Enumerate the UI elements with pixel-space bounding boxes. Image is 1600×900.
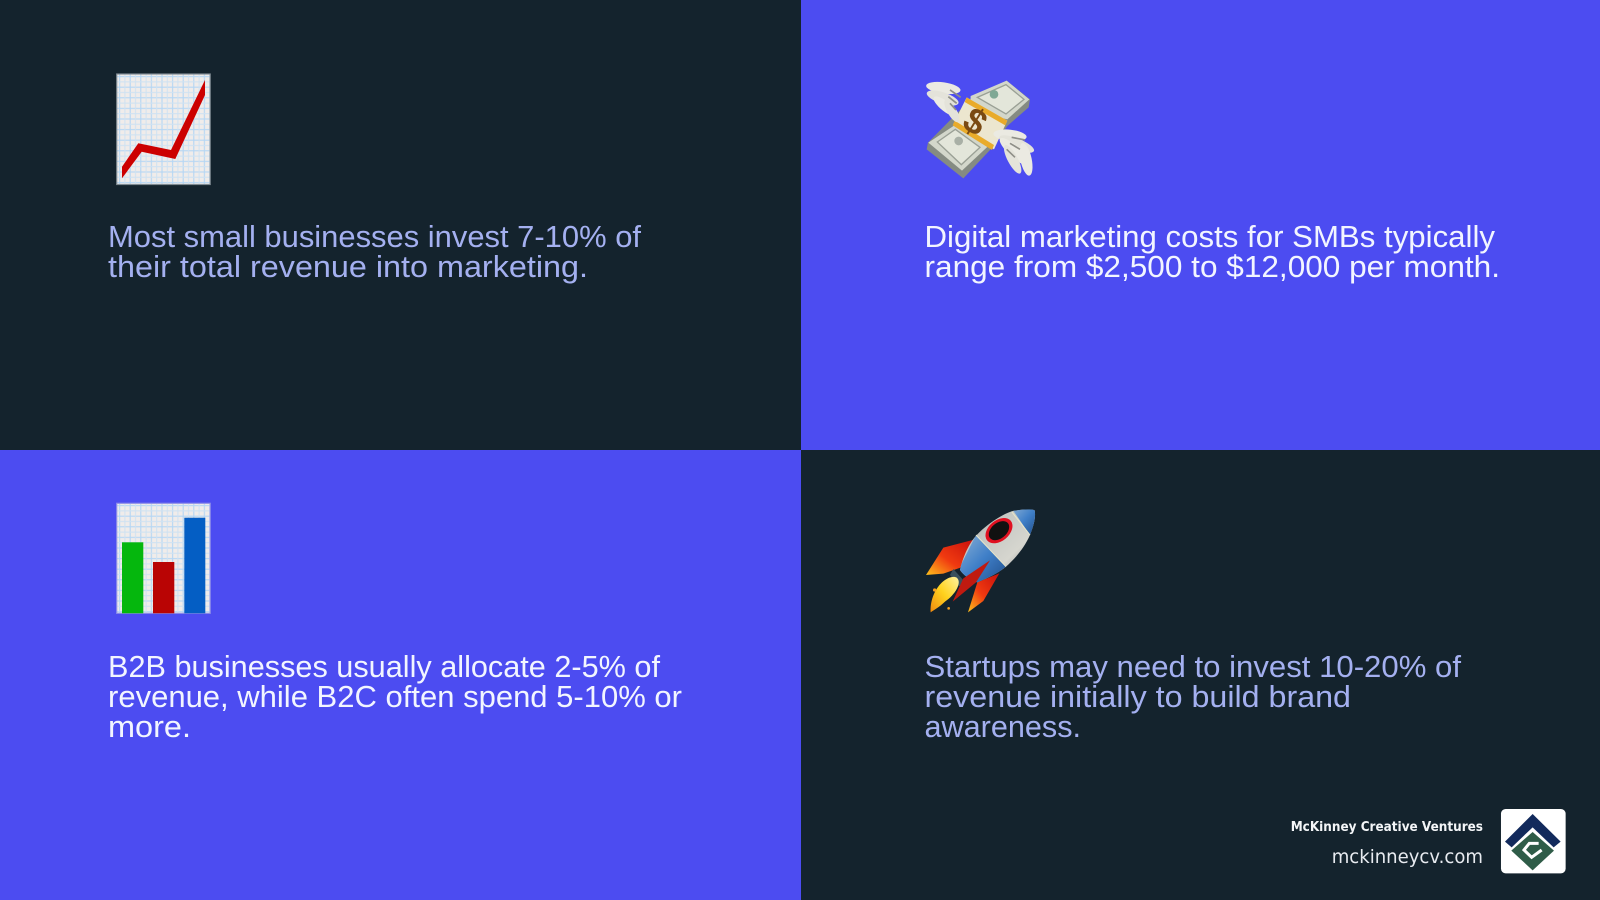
panel background (0, 450, 801, 900)
text: B2B versus B2C statistic (108, 649, 682, 744)
icon: line chart (117, 74, 210, 184)
panel background (0, 0, 801, 450)
text: startups statistic: awareness. (924, 709, 1081, 744)
icon: bar chart (117, 503, 210, 613)
panel: startups (926, 509, 1566, 874)
panel: small business share (0, 0, 801, 450)
brand name: McKinney Creative Ventures (1291, 820, 1483, 835)
icon: rocket (926, 505, 1038, 612)
icon: company logo (1501, 809, 1566, 873)
text: B2B versus B2C statistic: more. (108, 709, 191, 744)
text: startups statistic: Startups may need to invest 10-20% of (924, 649, 1461, 684)
text: digital marketing statistic: Digital marketing costs for SMBs typically (924, 219, 1496, 254)
panel background (801, 0, 1600, 450)
text: startups statistic (924, 649, 1461, 744)
text: B2B versus B2C statistic: B2B businesses usually allocate 2-5% of (108, 649, 660, 684)
text: small business statistic: their total revenue into marketing. (108, 249, 588, 284)
footer brand (1291, 809, 1566, 873)
text: digital marketing statistic (924, 219, 1500, 284)
text: startups statistic: revenue initially to build brand (924, 679, 1351, 714)
text: small business statistic: Most small businesses invest 7-10% of (108, 219, 641, 254)
panel background (801, 450, 1600, 900)
text: B2B versus B2C statistic: revenue, while B2C often spend 5-10% or (108, 679, 682, 714)
text: digital marketing statistic: range from $2,500 to $12,000 per month. (924, 249, 1500, 284)
icon: money with wings (925, 80, 1036, 178)
icon: money with wings: $ (956, 98, 995, 144)
website address: mckinneycv.com (1332, 846, 1483, 868)
text: small business statistic (108, 219, 641, 284)
panel: digital marketing costs (801, 0, 1600, 450)
panel: B2B versus B2C (0, 450, 801, 900)
